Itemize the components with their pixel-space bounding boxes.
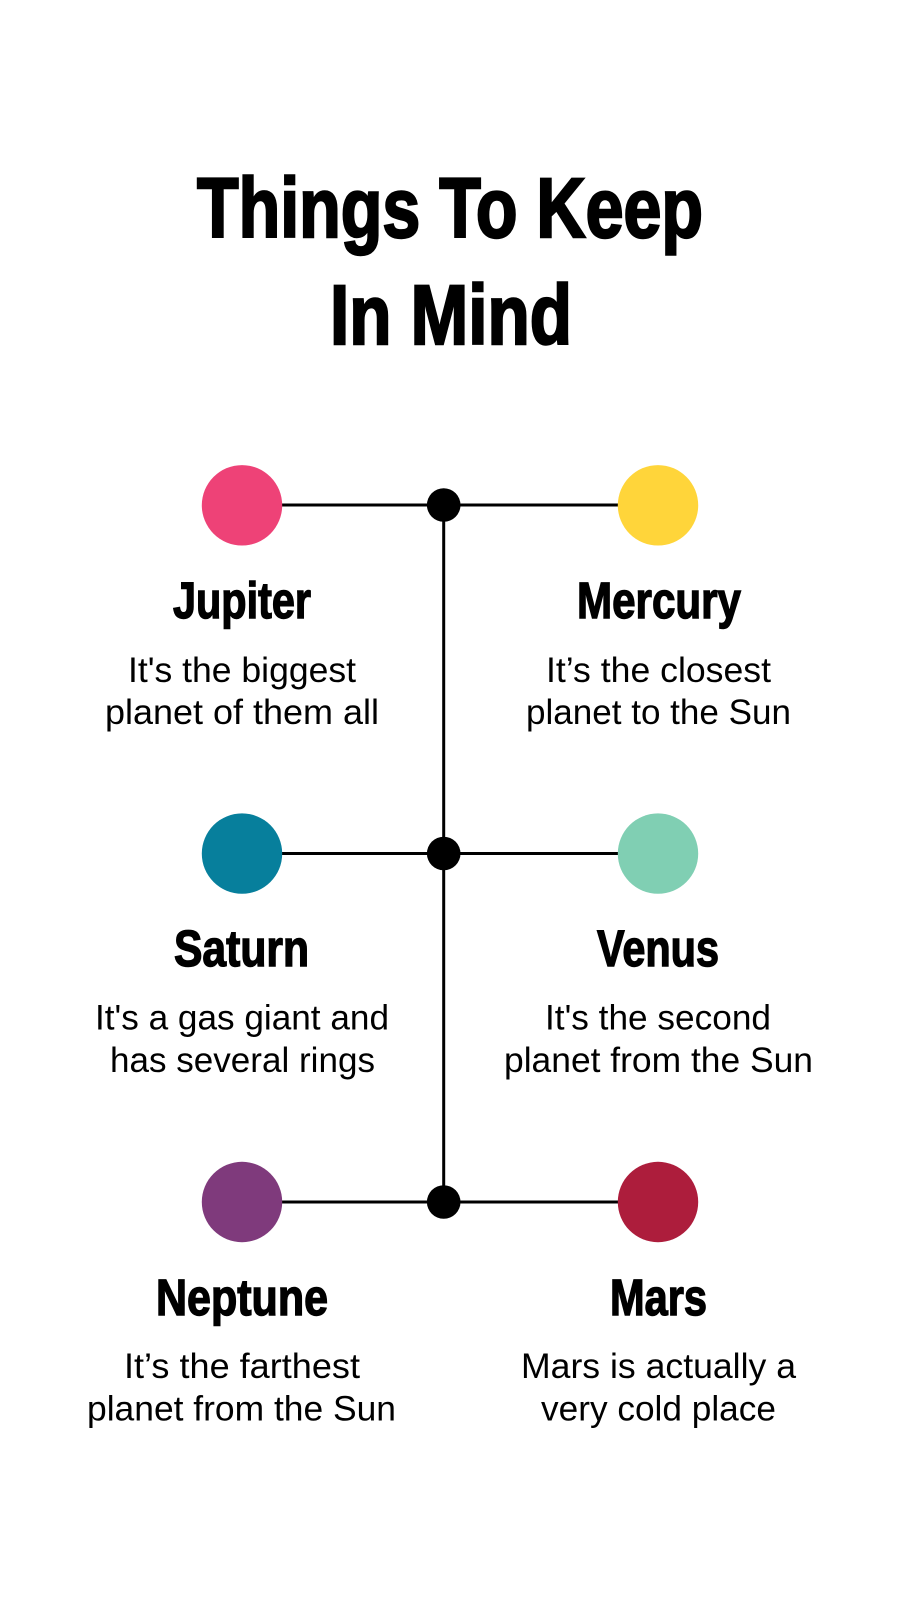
connector lines (242, 505, 658, 1202)
node: middle junction (427, 837, 461, 870)
text: Jupiter description: It's the biggest (128, 650, 356, 690)
panel: Neptune (87, 1162, 396, 1429)
panel: Mars (521, 1162, 796, 1429)
text: Neptune description: planet from the Sun (87, 1389, 396, 1429)
text: Neptune description: It’s the farthest (124, 1346, 360, 1386)
text: Jupiter description (105, 650, 379, 732)
text: Saturn description: It's a gas giant and (95, 998, 389, 1038)
icon: Saturn circle (202, 813, 282, 894)
text: Venus description (504, 998, 813, 1080)
title: Things To Keep (197, 161, 703, 255)
text: Mercury description: planet to the Sun (526, 692, 791, 732)
title: In Mind (330, 268, 572, 362)
heading: Saturn: Saturn (174, 920, 309, 977)
title (197, 161, 703, 362)
panel: Jupiter (105, 465, 379, 732)
text: Saturn description (95, 998, 389, 1080)
text: Venus description: planet from the Sun (504, 1040, 813, 1080)
heading: Jupiter: Jupiter (173, 572, 311, 629)
text: Neptune description (87, 1346, 396, 1429)
panel: Venus (504, 813, 813, 1080)
heading: Venus: Venus (597, 920, 719, 977)
text: Jupiter description: planet of them all (105, 692, 379, 732)
heading: Mars: Mars (610, 1269, 707, 1326)
panel: Mercury (526, 465, 791, 732)
icon: Mars circle (618, 1162, 698, 1242)
text: Mars description (521, 1346, 796, 1429)
panel: Saturn (95, 813, 389, 1080)
text: Mercury description: It’s the closest (546, 650, 771, 690)
node: bottom junction (427, 1185, 461, 1219)
text: Venus description: It's the second (545, 998, 771, 1038)
icon: Mercury circle (618, 465, 698, 546)
node: top junction (427, 488, 461, 522)
icon: Neptune circle (202, 1162, 282, 1242)
heading: Mercury: Mercury (577, 572, 742, 629)
icon: Jupiter circle (202, 465, 282, 546)
text: Mars description: very cold place (541, 1389, 776, 1429)
text: Mercury description (526, 650, 791, 732)
text: Saturn description: has several rings (110, 1040, 375, 1080)
text: Mars description: Mars is actually a (521, 1346, 796, 1386)
heading: Neptune: Neptune (156, 1269, 328, 1326)
icon: Venus circle (618, 813, 698, 894)
